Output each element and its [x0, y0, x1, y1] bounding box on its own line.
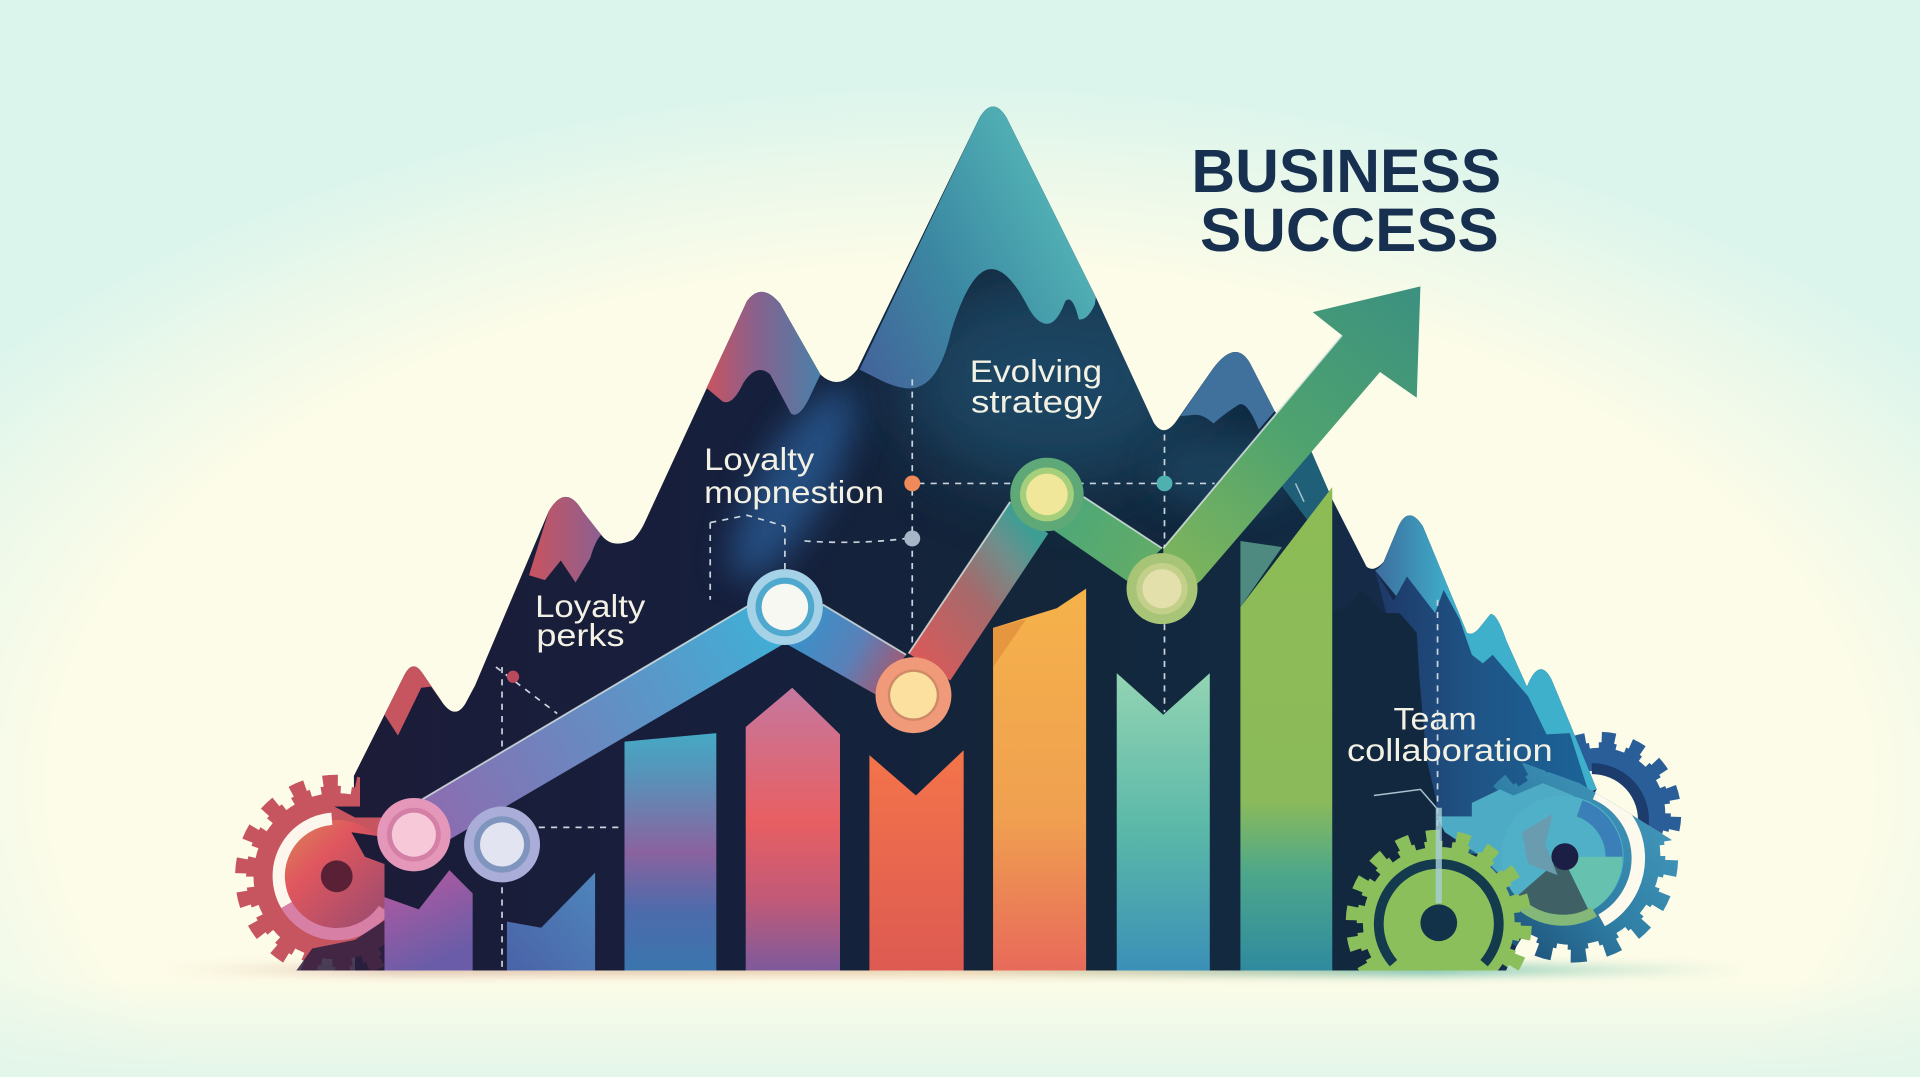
segment: rising blue [422, 606, 786, 840]
bar 5 [869, 750, 964, 971]
arrow [1163, 286, 1420, 612]
label: loyalty mopnestion: mopnestion [704, 474, 884, 510]
bar 2 [507, 873, 595, 971]
node: orange [876, 657, 951, 733]
gear: navy blue back [1575, 732, 1682, 834]
bar 4 [746, 688, 840, 971]
node: blue [747, 569, 823, 645]
gear: teal [1473, 758, 1671, 956]
title [1191, 137, 1501, 264]
right darkest ridge [1332, 590, 1436, 971]
label: loyalty mopnestion: Loyalty [704, 441, 814, 477]
bar 6 [993, 589, 1086, 971]
bar 6 shading [993, 619, 1026, 667]
segment: falling green [1041, 485, 1162, 581]
segment: rising red to green [909, 502, 1048, 680]
label: loyalty mopnestion [704, 441, 884, 510]
bar 1 [384, 870, 473, 971]
cap: second red peak [529, 497, 601, 583]
label: evolving strategy: Evolving [970, 353, 1102, 389]
cap: main peak [860, 106, 1096, 388]
node: lavender [464, 807, 540, 882]
dark silhouette [354, 106, 1597, 971]
label: evolving strategy: strategy [971, 383, 1102, 419]
bar 8 main [1240, 487, 1332, 971]
mountain range [354, 106, 1597, 971]
teal gear upper body [1436, 783, 1573, 893]
cap: third peak [707, 292, 820, 415]
right teal ridge [1375, 515, 1597, 796]
cap: small left peak [384, 666, 443, 736]
label: loyalty perks: Loyalty [535, 588, 645, 624]
gear: green [1346, 808, 1532, 970]
label: team collaboration: collaboration [1347, 732, 1553, 768]
chart guide lines [496, 379, 1438, 967]
gear: red [235, 774, 384, 970]
title: BUSINESS [1191, 137, 1501, 205]
label: loyalty perks [535, 588, 645, 653]
label: team collaboration: Team [1393, 700, 1477, 736]
node: green [1010, 458, 1084, 531]
label: evolving strategy [970, 353, 1102, 419]
guide dots [507, 475, 1172, 683]
floor shadow [159, 964, 1751, 975]
bar chart [384, 487, 1332, 971]
small leader lines [1296, 483, 1436, 808]
edge highlights [422, 335, 1342, 799]
teal gear disc [1501, 796, 1624, 920]
label: loyalty perks: perks [536, 617, 624, 653]
trend line [422, 286, 1420, 840]
label: team collaboration [1347, 700, 1553, 768]
bar 7 [1117, 673, 1210, 971]
cap: right small peak [1180, 352, 1275, 430]
node: pink [377, 798, 451, 871]
node: olive [1127, 553, 1198, 624]
texture haze [709, 275, 1298, 596]
right blue ridge [1375, 570, 1588, 816]
bar 8 shading [1240, 541, 1282, 607]
bar 3 [624, 733, 716, 971]
shaded ridge above green bar [1281, 452, 1332, 524]
title: SUCCESS [1200, 196, 1499, 264]
segment: falling blue [778, 592, 906, 695]
